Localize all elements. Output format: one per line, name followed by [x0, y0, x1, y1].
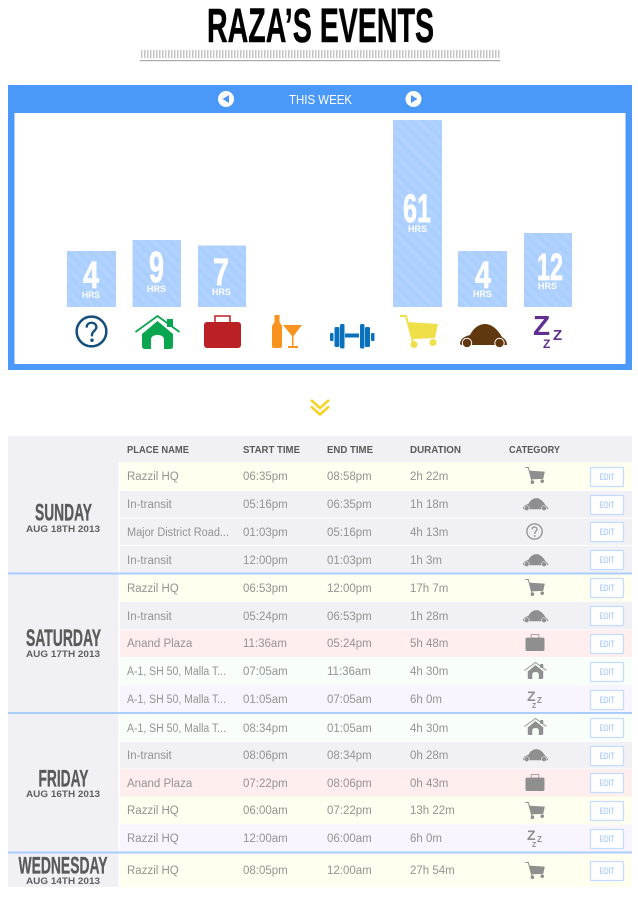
row: Anand Plaza: EDIT: [600, 778, 615, 788]
day: Friday: [8, 714, 118, 852]
row: A-1, SH 50: 4h 30m: [410, 666, 448, 678]
row: A-1, SH 50: A-1, SH 50, Malla T...: [127, 666, 226, 678]
row: A-1, SH 50: EDIT: [600, 695, 615, 705]
bar: home 9 hrs: 9: [149, 243, 164, 292]
row: In-transit: EDIT: [600, 751, 615, 761]
icon: question mark: [77, 317, 106, 346]
row: A-1, SH 50: [120, 714, 632, 742]
row: A-1, SH 50: A-1, SH 50, Malla T...: [127, 723, 226, 735]
row: Razzil HQ: 06:35pm: [243, 471, 288, 483]
row: In-transit: [120, 491, 632, 518]
row: In-transit: 05:16pm: [243, 499, 288, 511]
row: Razzil HQ: Razzil HQ: [127, 865, 179, 877]
row: Anand Plaza: [120, 769, 632, 796]
row: Razzil HQ: [120, 574, 632, 602]
row: In-transit: 1h 18m: [410, 499, 448, 511]
bar: transit 4 hrs: [458, 251, 507, 307]
row: A-1, SH 50: 01:05am: [243, 694, 288, 706]
row: In-transit: 08:06pm: [243, 750, 288, 762]
row: In-transit: 0h 28m: [410, 750, 448, 762]
table header: PLACE NAME: [127, 445, 189, 456]
day: Wednesday: AUG 14TH 2013: [26, 876, 100, 887]
icon: double chevron down: [311, 400, 329, 414]
bar: home 9 hrs: [132, 240, 181, 307]
row: In-transit: 1h 28m: [410, 611, 448, 623]
title underline: [140, 50, 500, 61]
row: Razzil HQ: EDIT: [600, 834, 615, 844]
icon: briefcase: [204, 316, 241, 348]
row: Razzil HQ: 06:53pm: [243, 583, 288, 595]
previous week button: [218, 91, 234, 107]
row: In-transit: 01:03pm: [327, 555, 372, 567]
bar: sleep 12 hrs: 12: [537, 247, 563, 289]
row: Razzil HQ: Z: [532, 842, 537, 849]
row: Razzil HQ: 07:22pm: [327, 805, 372, 817]
row: Razzil HQ: EDIT: [600, 866, 615, 876]
bar: shopping 61 hrs: 61: [403, 187, 431, 231]
row: In-transit: 06:53pm: [327, 611, 372, 623]
day: Friday: AUG 16TH 2013: [26, 789, 100, 800]
row: In-transit: 1h 3m: [410, 555, 442, 567]
table header: CATEGORY: [509, 445, 560, 456]
row: Anand Plaza: 5h 48m: [410, 638, 448, 650]
row: Razzil HQ: 12:00pm: [327, 583, 372, 595]
row: A-1, SH 50: A-1, SH 50, Malla T...: [127, 694, 226, 706]
row: Major District Road: 05:16pm: [327, 527, 372, 539]
bar: shopping 61 hrs: HRS: [408, 224, 427, 234]
row: Razzil HQ: Razzil HQ: [127, 805, 179, 817]
row: In-transit: [120, 742, 632, 768]
next week button: [406, 91, 422, 107]
row: A-1, SH 50: 11:36am: [327, 666, 371, 678]
row: Razzil HQ: 13h 22m: [410, 805, 455, 817]
icon: sleep: Z: [533, 310, 550, 341]
bar: transit 4 hrs: 4: [475, 255, 491, 297]
day: Friday: FRIDAY: [38, 766, 88, 792]
bar: unknown 4 hrs: HRS: [82, 290, 100, 300]
row: A-1, SH 50: 08:34pm: [243, 723, 288, 735]
panel: this week chart: [8, 85, 632, 370]
bar: work 7 hrs: HRS: [212, 287, 231, 297]
row: A-1, SH 50: 6h 0m: [410, 694, 442, 706]
icon: sleep: Z: [543, 337, 550, 351]
day: Wednesday: [8, 852, 118, 887]
icon: sleep: Z: [553, 327, 562, 344]
day: Sunday: AUG 18TH 2013: [26, 524, 100, 535]
row: Anand Plaza: 07:22pm: [243, 778, 288, 790]
row: In-transit: EDIT: [600, 611, 615, 621]
row: A-1, SH 50: EDIT: [600, 667, 615, 677]
row: Razzil HQ: 08:58pm: [327, 471, 372, 483]
row: A-1, SH 50: 01:05am: [327, 723, 372, 735]
row: Razzil HQ: 06:00am: [327, 833, 372, 845]
row: Anand Plaza: EDIT: [600, 639, 615, 649]
bar: transit 4 hrs: HRS: [473, 289, 492, 299]
row: Major District Road: 01:03pm: [243, 527, 288, 539]
title: RAZA’S EVENTS: [207, 0, 434, 53]
row: A-1, SH 50: Z: [537, 696, 542, 705]
row: Razzil HQ: Razzil HQ: [127, 471, 179, 483]
row: In-transit: In-transit: [127, 750, 173, 762]
row: Razzil HQ: EDIT: [600, 583, 615, 593]
row: A-1, SH 50: [120, 685, 632, 712]
day: Saturday: [8, 574, 118, 712]
row: Razzil HQ: Razzil HQ: [127, 583, 179, 595]
row: A-1, SH 50: EDIT: [600, 723, 615, 733]
icon: shopping cart: [400, 316, 438, 348]
day: Sunday: [8, 436, 118, 572]
icon: sleep: [533, 310, 562, 351]
row: A-1, SH 50: 07:05am: [243, 666, 288, 678]
day: Sunday: SUNDAY: [35, 500, 92, 526]
row: In-transit: 05:24pm: [243, 611, 288, 623]
row: Razzil HQ: 2h 22m: [410, 471, 448, 483]
row: Razzil HQ: [120, 824, 632, 852]
row: In-transit: [120, 546, 632, 572]
row: Razzil HQ: [120, 854, 632, 887]
table header: START TIME: [243, 445, 300, 456]
row: In-transit: In-transit: [127, 555, 173, 567]
row: Anand Plaza: Anand Plaza: [127, 778, 193, 790]
row: Razzil HQ: EDIT: [600, 806, 615, 816]
bar: shopping 61 hrs: [393, 120, 442, 307]
row: Razzil HQ: 17h 7m: [410, 583, 448, 595]
row: In-transit: In-transit: [127, 611, 173, 623]
row: In-transit: 06:35pm: [327, 499, 372, 511]
bar: unknown 4 hrs: [67, 251, 116, 307]
row: Major District Road: 4h 13m: [410, 527, 448, 539]
day: Saturday: AUG 17TH 2013: [26, 649, 100, 660]
row: Razzil HQ: [120, 796, 632, 824]
row: Anand Plaza: 08:06pm: [327, 778, 372, 790]
row: In-transit: In-transit: [127, 499, 173, 511]
row: In-transit: 12:00pm: [243, 555, 288, 567]
row: A-1, SH 50: Z: [532, 703, 537, 710]
row: Major District Road: EDIT: [600, 527, 615, 537]
bar: work 7 hrs: 7: [213, 252, 229, 294]
row: Major District Road: [120, 518, 632, 545]
icon: house: [136, 316, 180, 349]
row: Razzil HQ: 27h 54m: [410, 865, 455, 877]
table header: END TIME: [327, 445, 373, 456]
icon: car: [460, 324, 507, 348]
row: Razzil HQ: Razzil HQ: [127, 833, 179, 845]
row: Razzil HQ: 08:05pm: [243, 865, 288, 877]
icon: bottle and martini: [272, 315, 302, 348]
row: Razzil HQ: 12:00am: [243, 833, 288, 845]
row: A-1, SH 50: Z: [527, 688, 536, 704]
row: In-transit: EDIT: [600, 555, 615, 565]
bar: sleep 12 hrs: [524, 233, 572, 307]
day: Saturday: SATURDAY: [26, 625, 101, 652]
day: Wednesday: WEDNESDAY: [18, 852, 108, 880]
row: Razzil HQ: Z: [537, 835, 542, 844]
row: Razzil HQ: Z: [527, 827, 536, 843]
row: A-1, SH 50: 07:05am: [327, 694, 372, 706]
row: Major District Road: Major District Road...: [127, 527, 229, 539]
row: Anand Plaza: 11:36am: [243, 638, 287, 650]
table header: DURATION: [410, 445, 461, 456]
row: Anand Plaza: 05:24pm: [327, 638, 372, 650]
table header: [8, 436, 632, 462]
row: In-transit: EDIT: [600, 500, 615, 510]
row: In-transit: [120, 602, 632, 630]
row: Razzil HQ: 12:00am: [327, 865, 372, 877]
row: Anand Plaza: 0h 43m: [410, 778, 448, 790]
row: In-transit: 08:34pm: [327, 750, 372, 762]
bar: unknown 4 hrs: 4: [83, 255, 99, 297]
bar: sleep 12 hrs: HRS: [538, 281, 557, 291]
row: Anand Plaza: [120, 630, 632, 657]
row: Razzil HQ: 6h 0m: [410, 833, 442, 845]
chart heading: THIS WEEK: [289, 92, 352, 107]
row: Anand Plaza: Anand Plaza: [127, 638, 193, 650]
row: Razzil HQ: [120, 462, 632, 490]
bar: home 9 hrs: HRS: [147, 284, 166, 294]
row: Razzil HQ: 06:00am: [243, 805, 288, 817]
icon: dumbbell: [330, 324, 374, 348]
row: A-1, SH 50: 4h 30m: [410, 723, 448, 735]
row: Razzil HQ: EDIT: [600, 472, 615, 482]
bar: work 7 hrs: [198, 246, 246, 307]
row: A-1, SH 50: [120, 658, 632, 685]
panel: events table: [8, 436, 632, 887]
